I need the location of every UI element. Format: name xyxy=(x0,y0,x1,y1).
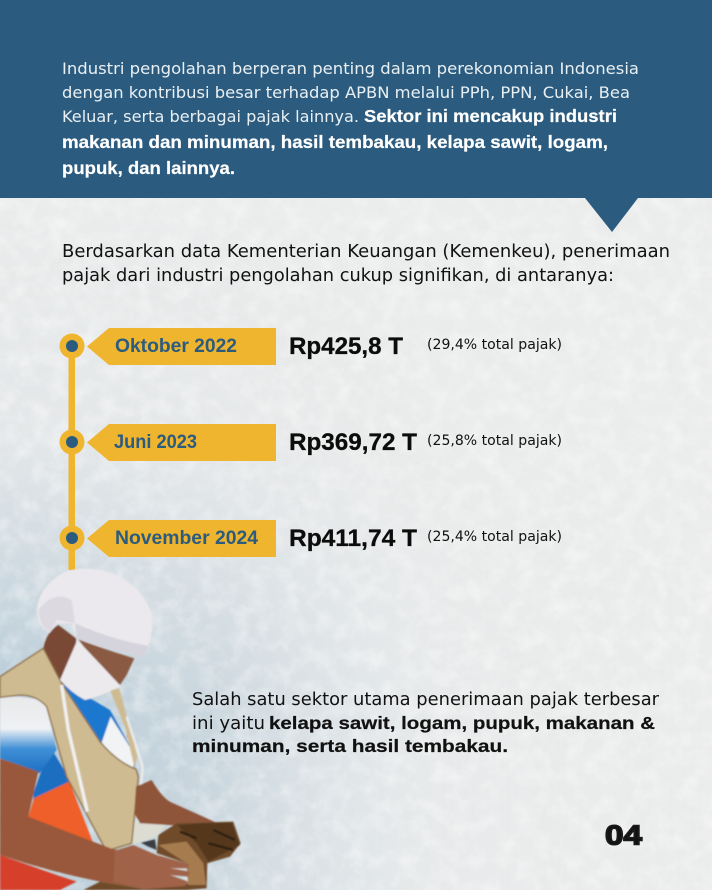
wood carving xyxy=(83,822,241,890)
mask ties xyxy=(62,685,87,812)
paper texture background xyxy=(0,198,712,890)
closing text block: Salah satu sektor utama penerimaan pajak terbesar xyxy=(192,690,660,710)
lead-in paragraph: Berdasarkan data Kementerian Keuangan (Kemenkeu), penerimaan xyxy=(62,242,670,262)
shirt blue panel xyxy=(33,747,72,800)
timeline xyxy=(60,328,562,570)
hair cap xyxy=(37,569,152,657)
tan vest xyxy=(0,648,138,849)
shirt sleeve xyxy=(0,697,57,773)
intro text block: Industri pengolahan berperan penting dalam perekonomian Indonesia xyxy=(62,59,639,78)
timeline entry: November 2024: Rp411,74 T xyxy=(289,525,417,552)
cap shading xyxy=(75,623,148,657)
timeline entry: Juni 2023: Rp369,72 T xyxy=(289,429,417,456)
neck xyxy=(43,625,77,685)
backdrop between arm and vest xyxy=(131,822,166,845)
shirt red hem xyxy=(0,855,77,890)
closing text block: kelapa sawit, logam, pupuk, makanan & xyxy=(269,713,655,733)
closing text block: ini yaitu xyxy=(192,714,265,734)
header banner xyxy=(0,0,712,232)
shirt orange panel xyxy=(28,782,93,853)
timeline entry: Oktober 2022: (29,4% total pajak) xyxy=(427,337,562,353)
upper arm xyxy=(0,758,140,888)
chest shirt xyxy=(62,682,136,768)
timeline entry: Oktober 2022: Rp425,8 T xyxy=(289,333,403,360)
banner pointer xyxy=(585,198,638,232)
timeline entry: Juni 2023: Juni 2023 xyxy=(114,432,197,453)
lower hand xyxy=(113,845,190,889)
intro text block: pupuk, dan lainnya. xyxy=(62,158,235,178)
intro text block: Keluar, serta berbagai pajak lainnya. xyxy=(62,107,359,126)
face xyxy=(78,639,134,685)
timeline entry: Oktober 2022: Oktober 2022 xyxy=(115,336,237,357)
timeline entry: Juni 2023 xyxy=(60,424,562,461)
timeline spine xyxy=(68,346,75,570)
forearm xyxy=(134,780,222,845)
timeline entry: November 2024: November 2024 xyxy=(115,528,258,549)
intro text block: dengan kontribusi besar terhadap APBN melalui PPh, PPN, Cukai, Bea xyxy=(62,83,630,102)
intro text block: makanan dan minuman, hasil tembakau, kelapa sawit, logam, xyxy=(62,132,608,152)
closing text block xyxy=(192,690,660,756)
page number: 04 xyxy=(605,820,642,850)
face mask xyxy=(60,640,121,700)
timeline entry: Juni 2023: (25,8% total pajak) xyxy=(427,433,562,449)
intro text block xyxy=(62,59,639,178)
lead-in paragraph: pajak dari industri pengolahan cukup signifikan, di antaranya: xyxy=(62,266,614,286)
worker illustration xyxy=(0,569,241,890)
closing text block: minuman, serta hasil tembakau. xyxy=(192,736,508,756)
lead-in paragraph xyxy=(62,242,670,286)
timeline entry: Oktober 2022 xyxy=(60,328,562,365)
timeline entry: November 2024: (25,4% total pajak) xyxy=(427,529,562,545)
intro text block: Sektor ini mencakup industri xyxy=(364,106,617,126)
tool handle xyxy=(141,839,157,850)
timeline entry: November 2024 xyxy=(60,520,562,557)
right sleeve hint xyxy=(127,727,136,747)
